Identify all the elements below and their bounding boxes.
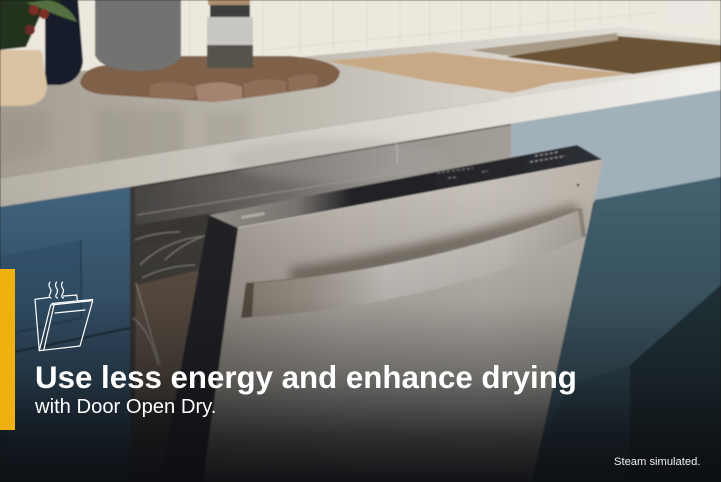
dishwasher tub opening bbox=[130, 120, 511, 482]
sink basin bbox=[470, 33, 721, 74]
backsplash tiles bbox=[0, 0, 721, 100]
dark bottom gradient overlay bbox=[0, 190, 721, 482]
icon: dishwasher with steam bbox=[34, 281, 94, 352]
steam cloud bbox=[230, 138, 450, 182]
right cabinet lower panel bbox=[520, 285, 721, 482]
cutting board bbox=[325, 52, 630, 93]
grey jar bbox=[95, 0, 181, 71]
door handle bbox=[241, 208, 586, 318]
door front panel bbox=[203, 160, 603, 482]
handle shadow bbox=[290, 204, 582, 285]
white cup bbox=[667, 0, 708, 25]
footnote: Steam simulated. bbox=[614, 456, 700, 468]
right cabinet upper band bbox=[511, 90, 721, 210]
right cabinet door bbox=[520, 177, 721, 482]
dark vase bbox=[45, 0, 83, 85]
pepper grinder bbox=[207, 0, 253, 68]
accent bar bbox=[0, 269, 15, 430]
indicator dot bbox=[577, 184, 579, 186]
heading: Use less energy and enhance drying bbox=[35, 360, 577, 395]
countertop surface bbox=[0, 27, 721, 178]
counter front lip bbox=[0, 65, 721, 207]
cream plant pot bbox=[0, 50, 47, 106]
left blue cabinet bbox=[0, 187, 130, 482]
wooden trivet bbox=[80, 56, 340, 102]
plant leaves bbox=[0, 0, 77, 50]
door top face with controls bbox=[209, 145, 603, 228]
subheading: with Door Open Dry. bbox=[35, 396, 216, 418]
trivet front scallops bbox=[150, 74, 318, 102]
door side edge bbox=[160, 215, 238, 482]
counter reflections bbox=[0, 108, 250, 170]
